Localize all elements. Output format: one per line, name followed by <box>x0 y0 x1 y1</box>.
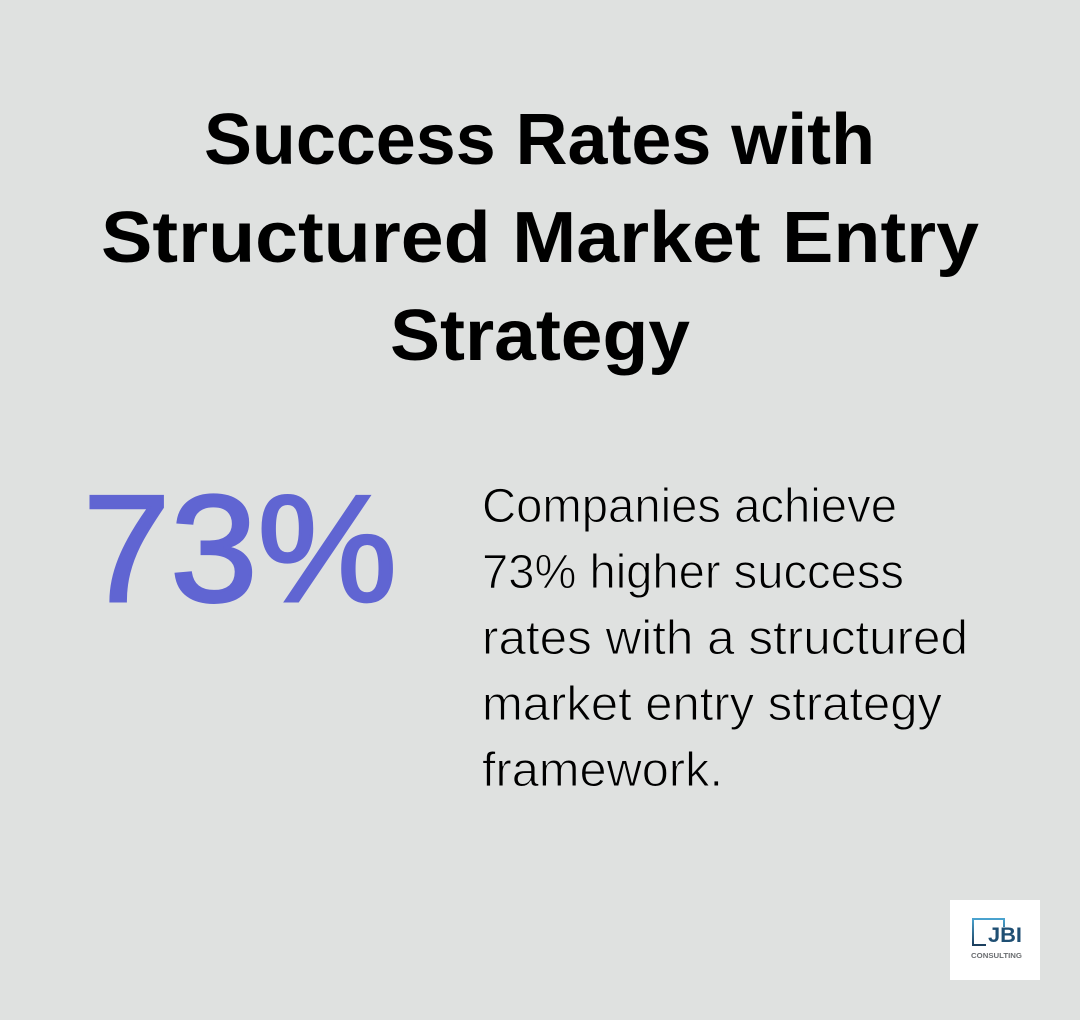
description text: framework. <box>482 744 723 797</box>
title: Structured Market Entry <box>101 198 979 278</box>
big statistic: 73%: 73% <box>83 464 397 634</box>
description text: market entry strategy <box>482 678 942 731</box>
description text: Companies achieve <box>482 480 897 533</box>
title: Strategy <box>390 296 690 376</box>
description text: 73% higher success <box>482 546 904 599</box>
logo letters: JBI <box>988 924 1022 947</box>
description text <box>482 480 968 797</box>
title <box>101 100 979 376</box>
logo subtitle: CONSULTING <box>971 953 1023 960</box>
logo square outline <box>973 919 1004 945</box>
description text: rates with a structured <box>482 612 968 665</box>
logo: JBI Consulting <box>950 900 1040 980</box>
title: Success Rates with <box>204 100 875 180</box>
